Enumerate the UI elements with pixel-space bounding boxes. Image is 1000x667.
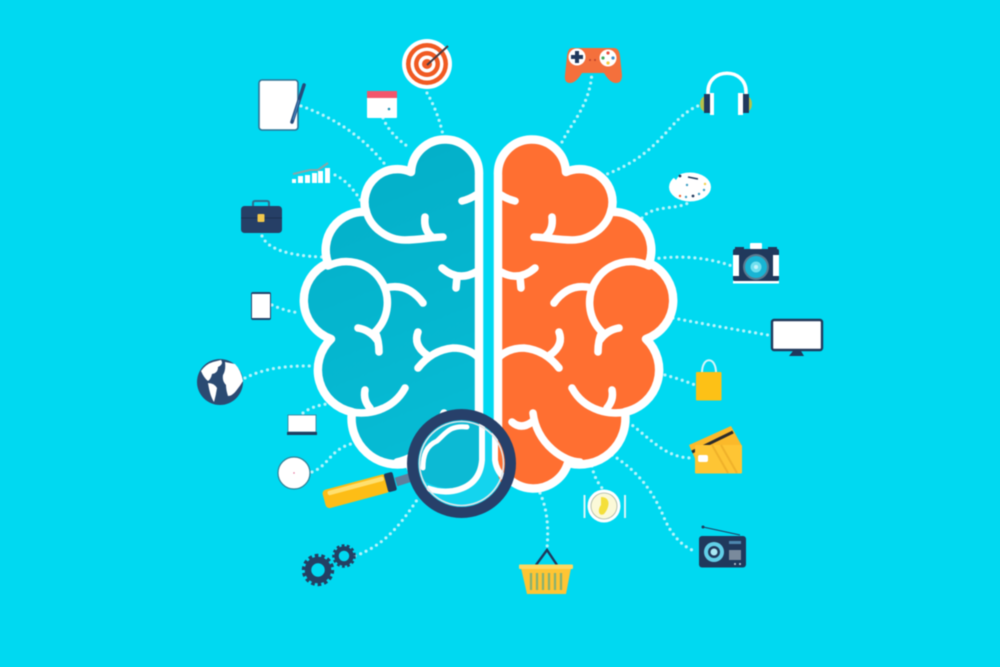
dotted connector lines xyxy=(245,72,768,556)
icon: headphones xyxy=(700,73,752,115)
icon: gears xyxy=(304,546,354,584)
icon: bar chart xyxy=(292,163,330,183)
right hemisphere (orange) xyxy=(498,139,673,488)
left hemisphere outline xyxy=(304,139,479,488)
icon: monitor xyxy=(772,320,822,356)
infographic: brain hemispheres with connected icons xyxy=(196,38,824,595)
right hemisphere folds xyxy=(499,195,649,462)
icon: calendar xyxy=(367,91,397,118)
icon: basket xyxy=(519,550,573,594)
handle grip xyxy=(322,472,397,509)
lens glass xyxy=(418,422,506,507)
magnifying glass xyxy=(322,410,520,514)
icon: paint palette xyxy=(669,172,711,202)
icon: gamepad xyxy=(565,48,622,83)
left hemisphere folds xyxy=(328,195,478,462)
icon: tablet xyxy=(251,292,271,320)
handle connector xyxy=(396,477,412,482)
icon: camera xyxy=(733,243,779,284)
icon: laptop xyxy=(287,415,317,435)
icon: briefcase xyxy=(241,201,282,233)
icon: notebook xyxy=(259,80,304,130)
right hemisphere outline xyxy=(498,139,673,488)
icon: dinner plate xyxy=(584,490,625,522)
icon: globe xyxy=(197,359,243,405)
left hemisphere (teal) xyxy=(304,139,479,488)
icon: credit cards xyxy=(689,426,742,474)
icon: shopping bag xyxy=(696,360,722,400)
lens frame xyxy=(412,414,510,512)
icon: target xyxy=(402,39,452,89)
icon: radio xyxy=(699,526,746,568)
icon: disc xyxy=(278,457,310,489)
lens inner rim xyxy=(420,422,504,506)
